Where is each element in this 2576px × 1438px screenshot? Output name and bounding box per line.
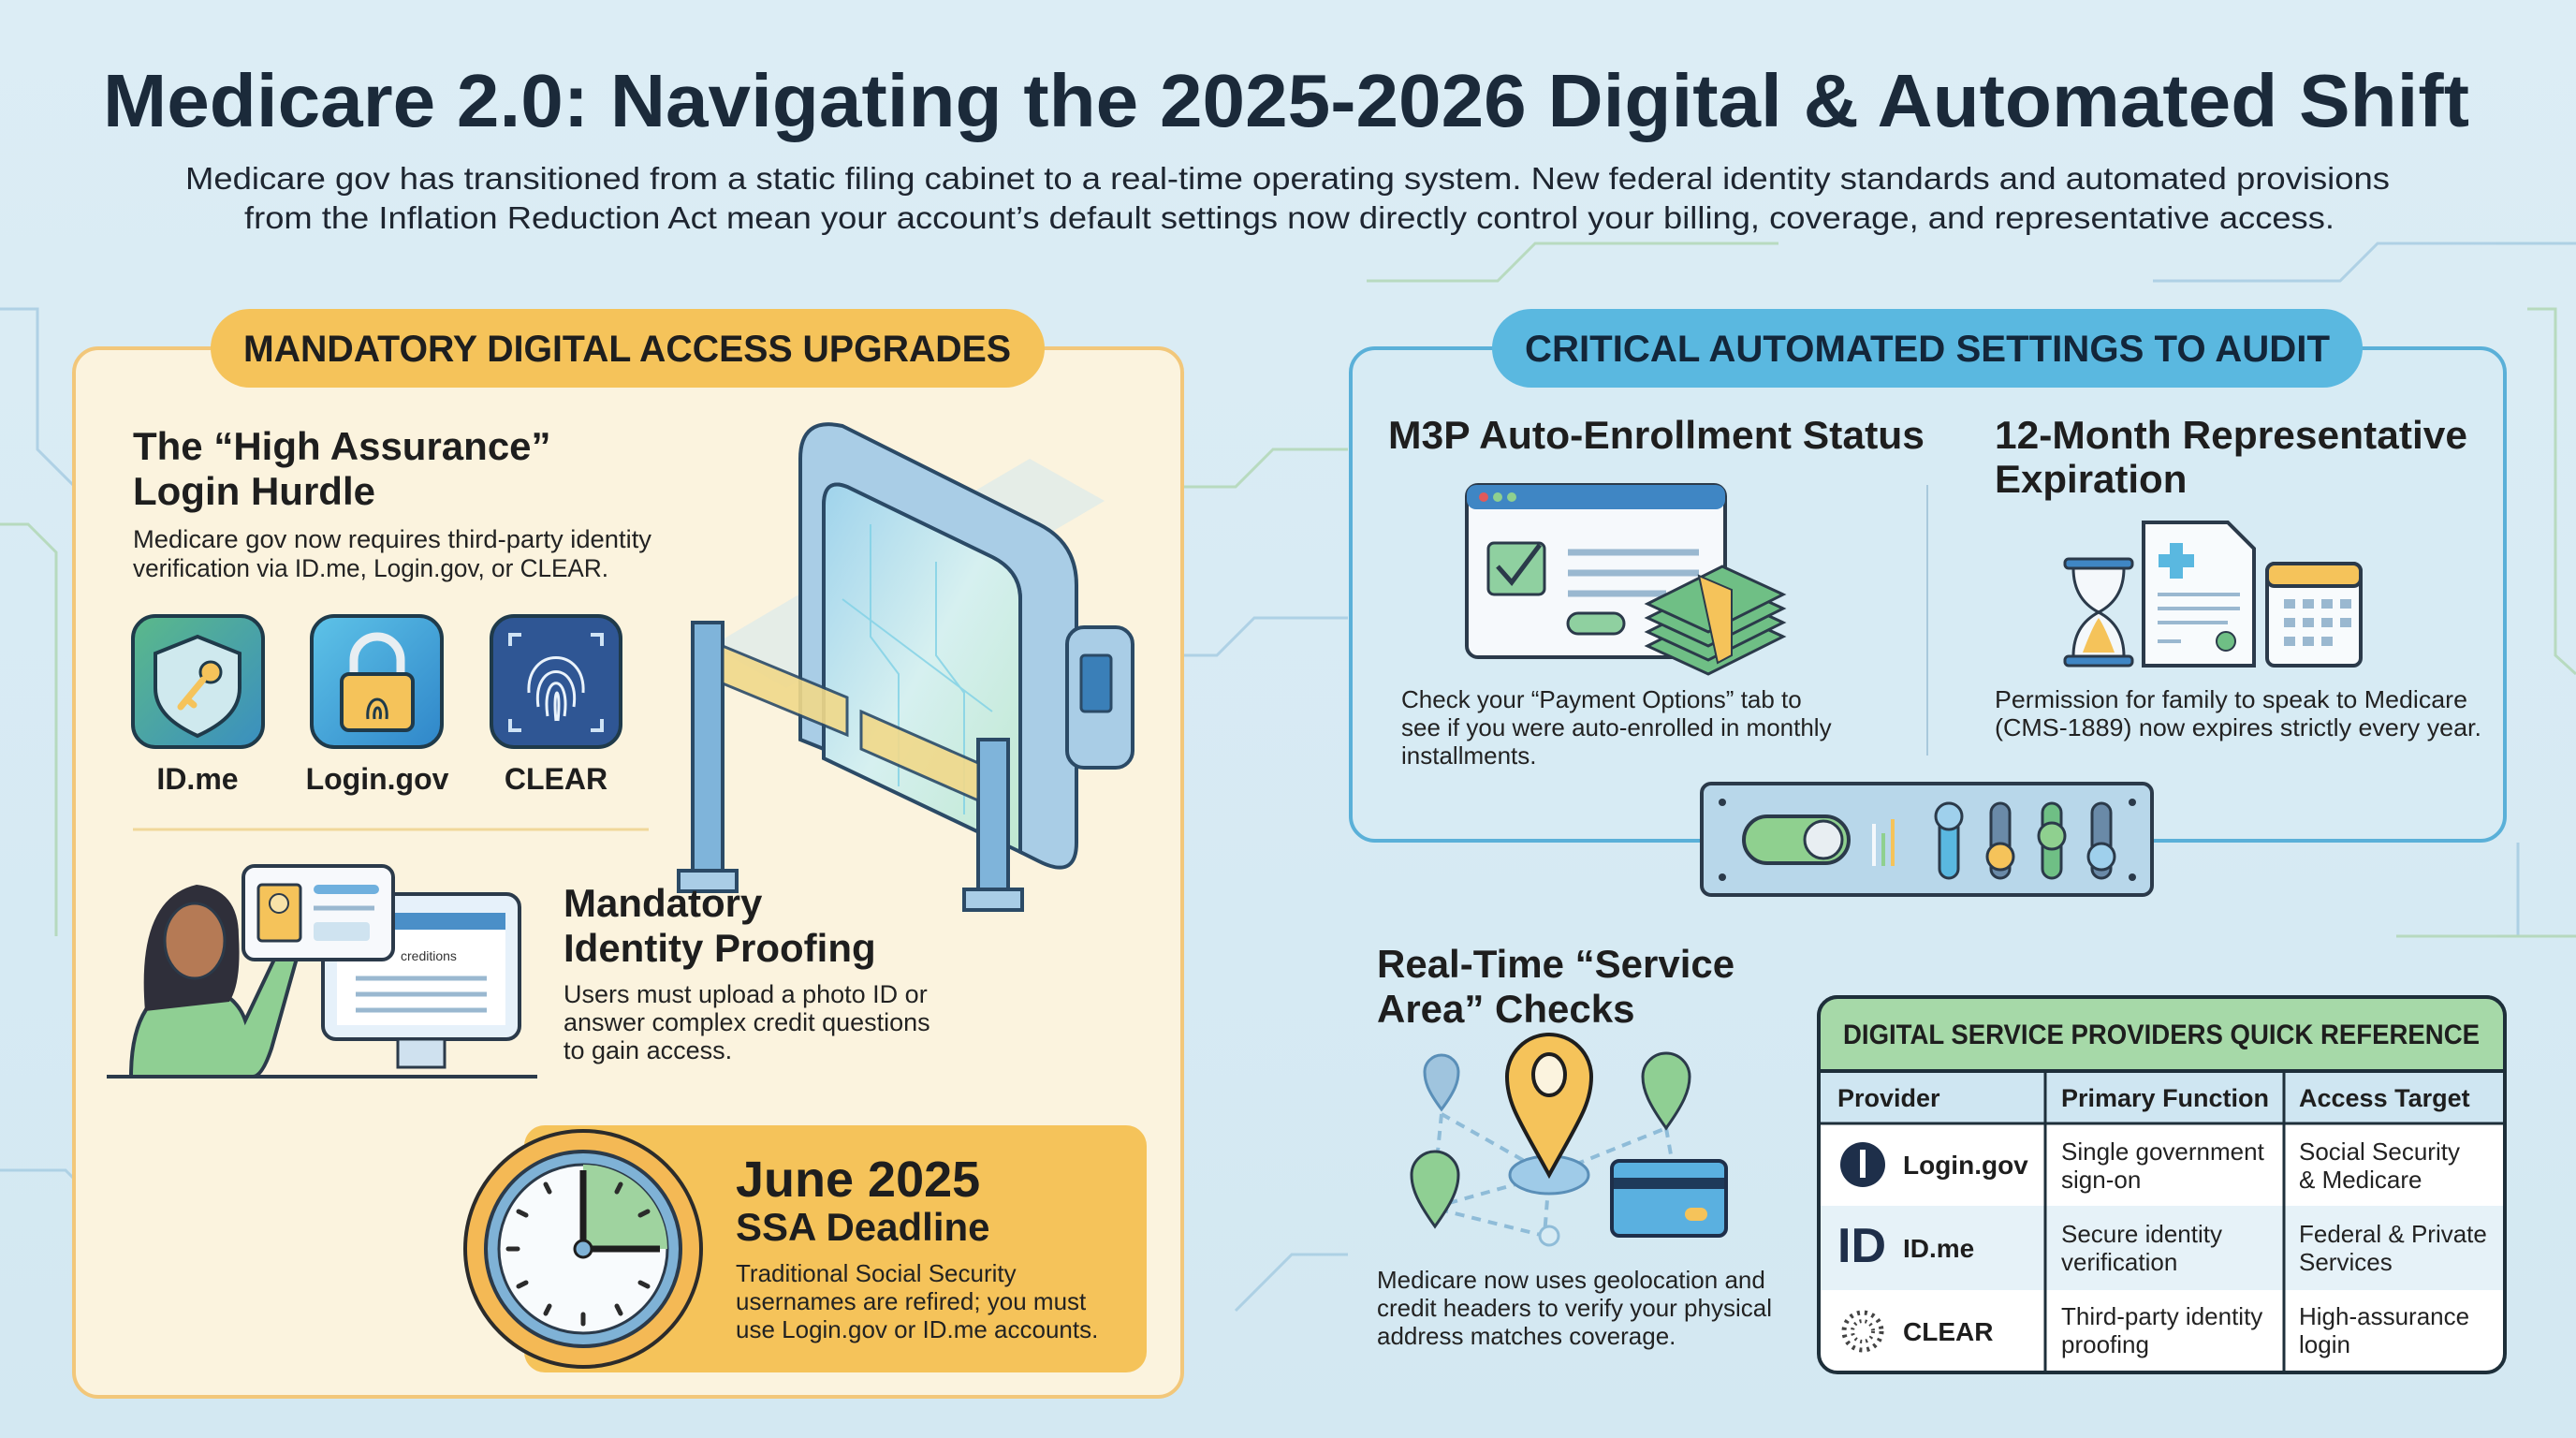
heading: high assurance login hurdle: Login Hurdle: [133, 469, 375, 513]
heading: mandatory identity proofing: Identity Proofing: [564, 926, 876, 970]
heading: 12-month representative: 12-Month Representative: [1995, 413, 2467, 457]
labels: provider icons: [156, 762, 607, 796]
row: CLEAR: [1844, 1302, 2469, 1358]
text: high assurance body: verification via ID.me, Login.gov, or CLEAR.: [133, 554, 608, 582]
callout: June 2025 SSA deadline: SSA Deadline: [736, 1205, 990, 1249]
text: high assurance body: [133, 525, 652, 582]
heading: 12-month representative: Expiration: [1995, 457, 2187, 501]
row: CLEAR: login: [2299, 1330, 2350, 1358]
icon: map pins network: [1412, 1034, 1726, 1245]
text: service area body: address matches coverage.: [1377, 1322, 1676, 1350]
callout: June 2025 SSA deadline: use Login.gov or ID.me accounts.: [736, 1315, 1098, 1343]
callout: June 2025 SSA deadline: June 2025: [736, 1152, 980, 1208]
icon: CLEAR fingerprint: [491, 616, 621, 747]
text: service area body: [1377, 1266, 1772, 1350]
table: digital service providers quick reference: Provider: [1837, 1084, 1940, 1112]
row: ID.me: Federal & Private: [2299, 1220, 2487, 1248]
row: Login.gov: Social Security: [2299, 1137, 2460, 1166]
heading: high assurance login hurdle: [133, 424, 551, 513]
heading: real-time service area checks: Real-Time “Service: [1377, 942, 1734, 986]
text: identity proofing body: [564, 980, 930, 1064]
row: CLEAR: CLEAR: [1903, 1317, 1993, 1346]
callout: June 2025 SSA deadline: Traditional Social Security: [736, 1259, 1017, 1287]
row: Login.gov: & Medicare: [2299, 1166, 2422, 1194]
row: ID.me: [1837, 1219, 2487, 1276]
row: CLEAR: proofing: [2061, 1330, 2149, 1358]
row: Login.gov: [1840, 1137, 2460, 1194]
table: digital service providers quick reference: [1819, 997, 2505, 1372]
text: M3P body: Check your “Payment Options” tab to: [1401, 685, 1802, 713]
row: ID.me: ID.me: [1903, 1234, 1974, 1263]
icon: hourglass, document, calendar: [2065, 522, 2361, 666]
table: digital service providers quick reference: Primary Function: [2061, 1084, 2269, 1112]
icon: Login.gov padlock: [312, 616, 442, 747]
panel: critical automated settings: [1351, 309, 2505, 841]
labels: provider icons: ID.me: [156, 762, 239, 796]
heading: real-time service area checks: [1377, 942, 1734, 1031]
subtitle: Medicare gov has transitioned from a static filing cabinet to a real-time operating system. New federal identity standards and automated provisions: [185, 161, 2390, 196]
icon: control panel toggles: [1702, 784, 2152, 895]
heading: mandatory identity proofing: [564, 881, 876, 970]
callout: June 2025 SSA deadline: [465, 1125, 1147, 1372]
text: representative body: [1995, 685, 2481, 741]
icon: clock: [465, 1131, 701, 1367]
heading: M3P: M3P Auto-Enrollment Status: [1388, 413, 1925, 457]
labels: provider icons: Login.gov: [306, 762, 449, 796]
text: identity proofing body: to gain access.: [564, 1036, 732, 1064]
text: identity proofing body: Users must upload a photo ID or: [564, 980, 928, 1008]
header pill: critical settings: CRITICAL AUTOMATED SETTINGS TO AUDIT: [1525, 329, 2330, 370]
subtitle: from the Inflation Reduction Act mean your account’s default settings now directly control your billing, coverage, and representative access.: [244, 200, 2334, 235]
table: digital service providers quick reference: Access Target: [2299, 1084, 2470, 1112]
row: Login.gov: sign-on: [2061, 1166, 2141, 1194]
text: service area body: credit headers to verify your physical: [1377, 1294, 1772, 1322]
header pill: critical settings: [1492, 309, 2363, 388]
illustration: person with ID: creditions: [401, 948, 457, 963]
title: Medicare 2.0: Navigating the 2025-2026 Digital & Automated Shift: [103, 59, 2469, 142]
illustration: security gate: [679, 424, 1133, 910]
illustration: person with ID: [107, 866, 537, 1077]
panel: mandatory digital access upgrades: [74, 309, 1182, 1397]
text: high assurance body: Medicare gov now requires third-party identity: [133, 525, 652, 553]
row: ID.me: Services: [2299, 1248, 2393, 1276]
text: service area body: Medicare now uses geolocation and: [1377, 1266, 1765, 1294]
subtitle: [185, 161, 2390, 235]
heading: high assurance login hurdle: The “High Assurance”: [133, 424, 551, 468]
header pill: mandatory: MANDATORY DIGITAL ACCESS UPGRADES: [243, 329, 1011, 370]
text: M3P body: see if you were auto-enrolled in monthly: [1401, 713, 1832, 741]
row: Login.gov: Single government: [2061, 1137, 2265, 1166]
icon: browser with checkbox and money: [1467, 485, 1783, 674]
text: M3P body: installments.: [1401, 741, 1537, 770]
row: Login.gov: Login.gov: [1903, 1151, 2028, 1180]
text: identity proofing body: answer complex credit questions: [564, 1008, 930, 1036]
callout: June 2025 SSA deadline: usernames are refired; you must: [736, 1287, 1087, 1315]
heading: mandatory identity proofing: Mandatory: [564, 881, 763, 925]
header pill: mandatory: [211, 309, 1045, 388]
labels: provider icons: CLEAR: [505, 762, 607, 796]
heading: real-time service area checks: Area” Checks: [1377, 987, 1634, 1031]
row: ID.me: verification: [2061, 1248, 2177, 1276]
text: representative body: (CMS-1889) now expires strictly every year.: [1995, 713, 2481, 741]
row: CLEAR: High-assurance: [2299, 1302, 2469, 1330]
row: ID.me: ID: [1837, 1219, 1886, 1273]
text: representative body: Permission for family to speak to Medicare: [1995, 685, 2467, 713]
table: digital service providers quick reference: DIGITAL SERVICE PROVIDERS QUICK REFERENCE: [1843, 1020, 2480, 1050]
text: M3P body: [1401, 685, 1832, 770]
row: CLEAR: Third-party identity: [2061, 1302, 2262, 1330]
icon: ID.me shield: [133, 616, 263, 747]
heading: 12-month representative: [1995, 413, 2467, 501]
row: ID.me: Secure identity: [2061, 1220, 2222, 1248]
